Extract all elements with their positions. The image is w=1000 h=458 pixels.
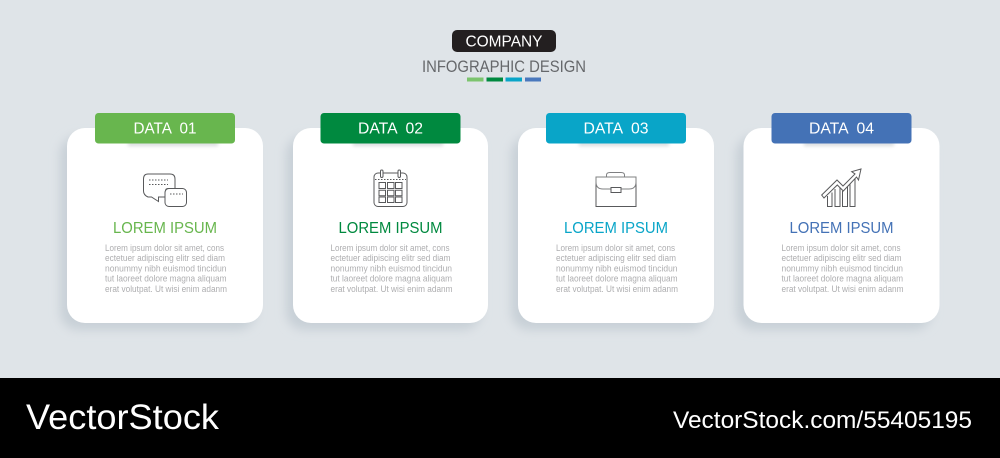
card shadow [60, 136, 256, 330]
footer bar [0, 378, 1000, 458]
tab shadow [128, 142, 218, 146]
footer logo: VectorStock [26, 398, 220, 437]
body text: tut laoreet dolore magna aliquam [556, 274, 678, 284]
tab: DATA 01 [134, 120, 196, 138]
panel: data 01 [60, 113, 263, 330]
card [518, 128, 714, 323]
body text: Lorem ipsum dolor sit amet, cons [782, 243, 901, 253]
body text: tut laoreet dolore magna aliquam [330, 274, 452, 284]
panel: data 02 [286, 113, 488, 330]
body text: ectetuer adipiscing elitr sed diam [105, 253, 225, 263]
card shadow [736, 136, 932, 330]
subtitle: INFOGRAPHIC DESIGN [422, 57, 586, 76]
body text: nonummy nibh euismod tincidun [330, 264, 452, 274]
panel: data 03 [511, 113, 714, 330]
icon: calendar [374, 170, 407, 206]
card [67, 128, 263, 323]
icon: growth chart [822, 169, 861, 206]
tab shadow [579, 142, 669, 146]
body text: Lorem ipsum dolor sit amet, cons [556, 243, 676, 253]
body text [782, 243, 904, 294]
body text: ectetuer adipiscing elitr sed diam [330, 253, 450, 263]
tab [95, 113, 235, 144]
tab [772, 113, 912, 144]
body text: erat volutpat. Ut wisi enim adanm [105, 284, 227, 294]
footer url: VectorStock.com/55405195 [673, 407, 972, 434]
heading: LOREM IPSUM [564, 220, 668, 237]
card [293, 128, 488, 323]
body text: tut laoreet dolore magna aliquam [105, 274, 226, 284]
body text: erat volutpat. Ut wisi enim adanm [330, 284, 452, 294]
tab [546, 113, 686, 144]
body text: nonummy nibh euismod tincidun [556, 264, 678, 274]
body text: erat volutpat. Ut wisi enim adanm [782, 284, 904, 294]
card shadow [511, 136, 707, 330]
body text: Lorem ipsum dolor sit amet, cons [330, 243, 450, 253]
body text: tut laoreet dolore magna aliquam [782, 274, 903, 284]
tab: DATA 04 [809, 120, 874, 138]
company badge [452, 30, 556, 52]
heading: LOREM IPSUM [338, 220, 442, 237]
heading: LOREM IPSUM [113, 220, 217, 237]
icon: briefcase [596, 172, 636, 206]
body text: nonummy nibh euismod tincidun [782, 264, 903, 274]
body text: Lorem ipsum dolor sit amet, cons [105, 243, 225, 253]
tab shadow [353, 142, 443, 146]
panel: data 04 [736, 113, 940, 330]
body text [556, 243, 678, 294]
heading: LOREM IPSUM [790, 220, 894, 237]
tab shadow [804, 142, 894, 146]
body text: nonummy nibh euismod tincidun [105, 264, 227, 274]
colour key bars [467, 78, 541, 82]
body text [330, 243, 452, 294]
company badge: COMPANY [466, 34, 543, 50]
tab [320, 113, 460, 144]
body text: ectetuer adipiscing elitr sed diam [556, 253, 676, 263]
tab: DATA 03 [584, 120, 648, 138]
card [744, 128, 940, 323]
card shadow [286, 136, 481, 330]
tab: DATA 02 [358, 120, 423, 138]
body text: ectetuer adipiscing elitr sed diam [782, 253, 902, 263]
body text: erat volutpat. Ut wisi enim adanm [556, 284, 678, 294]
header [422, 30, 586, 82]
body text [105, 243, 227, 294]
icon: speech bubbles [144, 174, 186, 206]
